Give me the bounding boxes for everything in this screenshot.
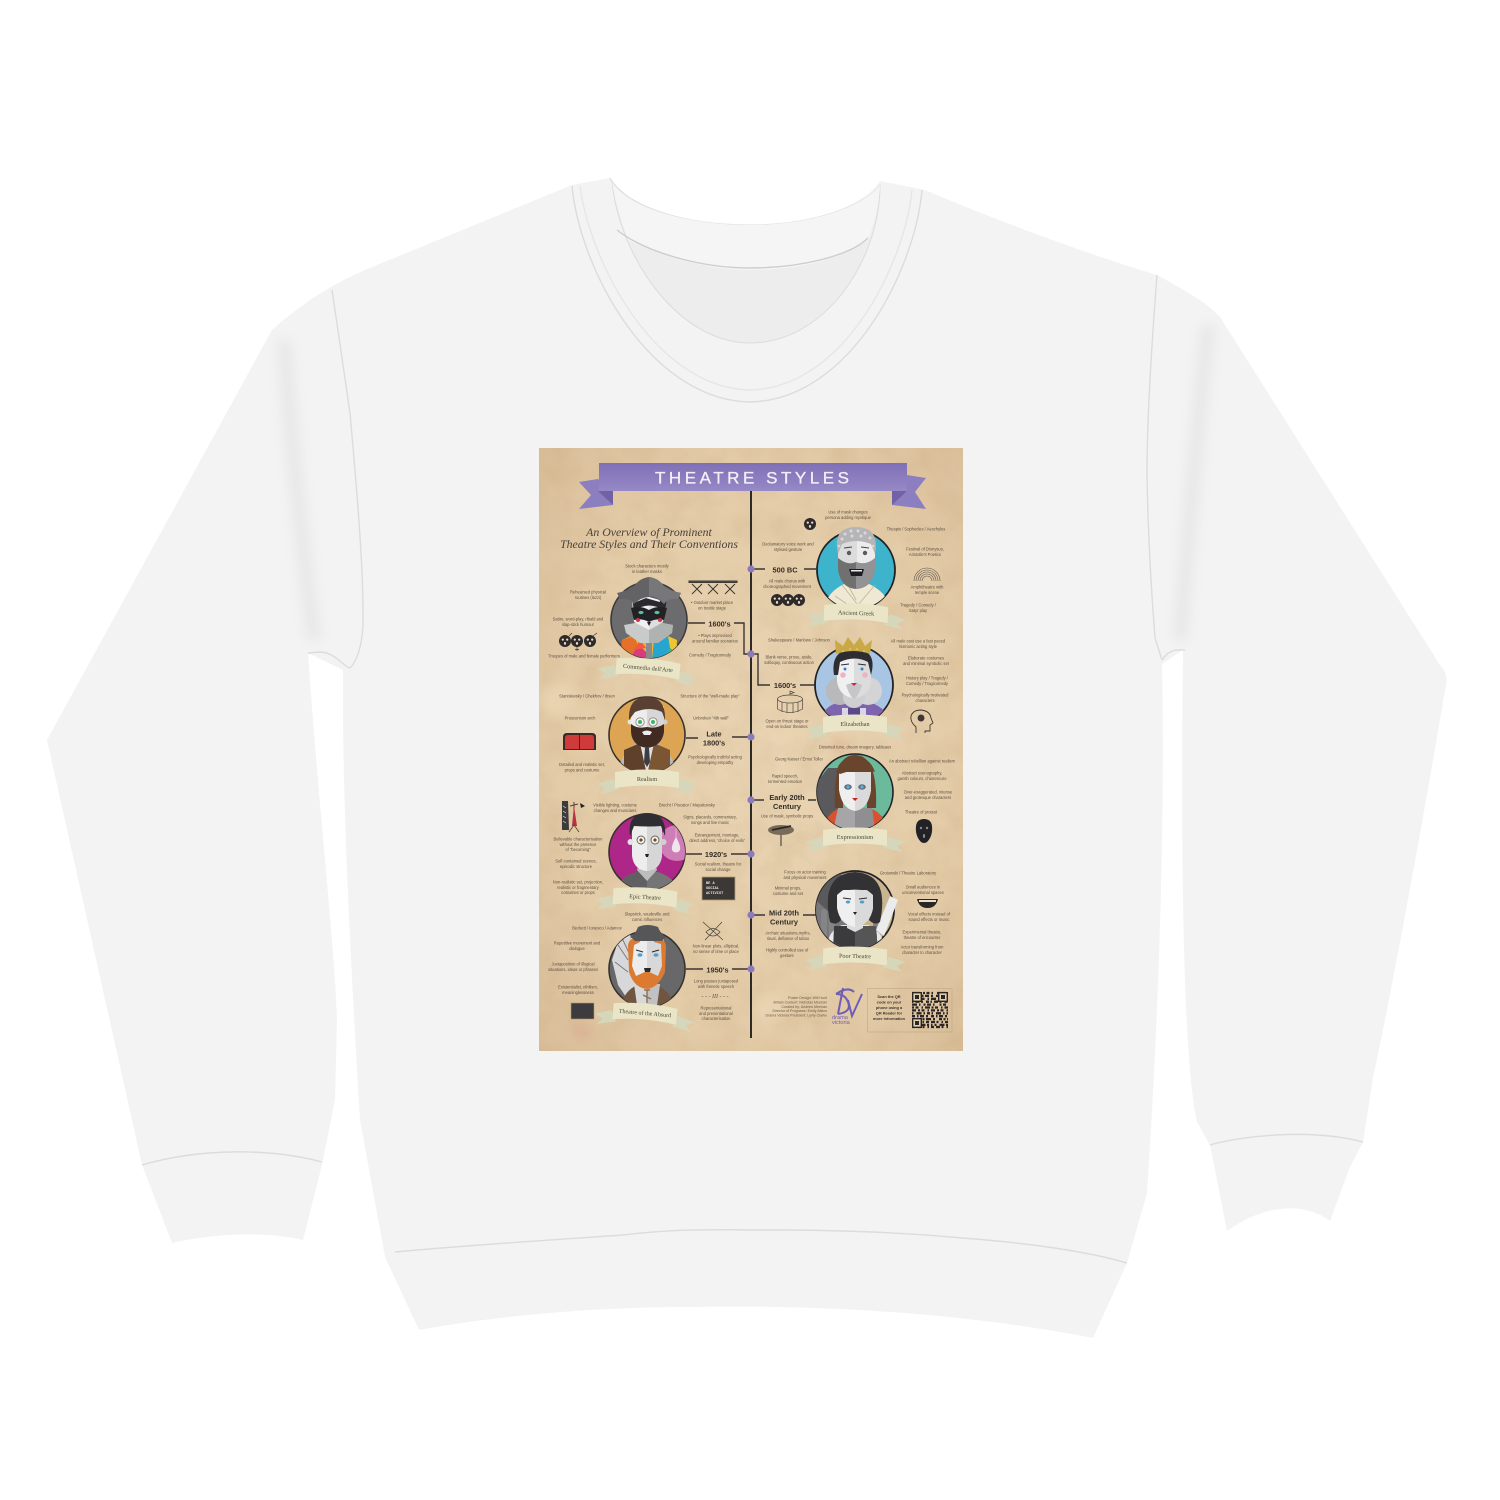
notes: Commedia: Satire, word-play, ribald and bbox=[553, 616, 603, 622]
notes: Absurd: Juxtaposition of illogical bbox=[551, 962, 595, 966]
notes: Ancient Greek: Tragedy / Comedy / bbox=[900, 602, 936, 608]
notes: Epic Theatre: changes and musicians bbox=[594, 808, 636, 813]
notes: Commedia bbox=[548, 564, 738, 658]
notes: Absurd bbox=[548, 912, 740, 1021]
icon: black mask bbox=[916, 819, 932, 843]
QR code bbox=[912, 993, 948, 1027]
notes: Elizabethan: History play / Tragedy / bbox=[906, 676, 948, 680]
QR instruction: more information bbox=[873, 1016, 906, 1021]
notes: Expressionism: Use of mask, symbolic props bbox=[761, 814, 813, 818]
icon: symbolic prop bbox=[768, 825, 794, 846]
notes: Ancient Greek: Thespis / Sophocles / Aeschylus bbox=[887, 526, 945, 532]
notes: Ancient Greek: persona adding mystique bbox=[825, 515, 872, 520]
notes: Ancient Greek: All male chorus with bbox=[769, 578, 805, 584]
notes: Epic Theatre: Brecht / Piscator / Mayakovsky bbox=[659, 802, 716, 808]
connectors bbox=[686, 569, 816, 969]
paper stains bbox=[542, 682, 848, 1042]
icon: chalkboard bbox=[702, 877, 735, 900]
icon: proscenium curtain bbox=[563, 733, 596, 750]
notes: Elizabethan: and minimal symbolic set bbox=[903, 661, 950, 666]
notes: Epic Theatre: without the pretence bbox=[560, 842, 597, 847]
notes: Elizabethan: Psychologically motivated bbox=[902, 692, 948, 698]
icon: mask bbox=[804, 518, 816, 530]
notes: Elizabethan: soliloquy, continuous action bbox=[764, 660, 815, 665]
notes: Elizabethan: Open on thrust stage or bbox=[765, 718, 809, 724]
portrait: Absurd bbox=[609, 925, 685, 1012]
subtitle: Theatre Styles and Their Conventions bbox=[560, 537, 738, 551]
notes: Ancient Greek: Aristotle's Poetics bbox=[909, 552, 941, 557]
notes: Expressionism: An abstract rebellion against realism bbox=[889, 758, 956, 764]
notes: Expressionism: garish colours, chiaroscuro bbox=[898, 776, 947, 781]
raised arm bbox=[876, 896, 898, 936]
notes: Poor Theatre bbox=[765, 870, 951, 958]
logo: drama victoria: victoria bbox=[832, 1020, 851, 1026]
back collar band bbox=[612, 182, 880, 270]
icon: dark panel bbox=[571, 1003, 594, 1019]
logo: drama victoria bbox=[832, 988, 862, 1026]
date: 1600's: 1600's bbox=[774, 681, 796, 690]
notes: Commedia: in leather masks bbox=[632, 569, 662, 574]
notes: Absurd: Slapstick, vaudeville and bbox=[625, 912, 669, 916]
poster bbox=[539, 448, 963, 1051]
notes: Epic Theatre: Estrangement, montage, bbox=[695, 832, 739, 838]
notes: Elizabethan: end-on indoor theatres bbox=[766, 724, 808, 729]
notes: Ancient Greek bbox=[762, 510, 945, 613]
notes: Realism bbox=[559, 694, 743, 772]
notes: Realism: Proscenium arch bbox=[565, 716, 596, 720]
notes: Realism: Stanislavsky / Chekhov / Ibsen bbox=[559, 694, 616, 698]
notes: Epic Theatre: Social realism, theatre for bbox=[695, 862, 741, 866]
notes: Absurd: Existentialist, nihilism, bbox=[558, 984, 598, 990]
icon: chalkboard: BE A bbox=[706, 882, 715, 886]
notes: Epic Theatre: episodic structure bbox=[560, 864, 593, 869]
notes: Ancient Greek: Satyr play bbox=[909, 608, 928, 613]
notes: Poor Theatre: theatre of encounter bbox=[904, 935, 941, 940]
timeline nodes bbox=[747, 565, 755, 973]
sleeve fold shading bbox=[284, 325, 1208, 640]
notes: Ancient Greek: Festival of Dionysus, bbox=[906, 546, 944, 552]
notes: Epic Theatre: Visible lighting, costume bbox=[593, 802, 637, 808]
notes: Commedia: Rehearsed physical bbox=[570, 590, 606, 594]
notes: Absurd: characterisation bbox=[702, 1016, 731, 1021]
notes: Epic Theatre: of "becoming" bbox=[565, 847, 591, 852]
portrait: Commedia bbox=[611, 577, 687, 662]
paper mottling bbox=[539, 448, 963, 1051]
date: Mid 20th Century: Century bbox=[770, 918, 799, 926]
banner: Epic Theatre: Epic Theatre bbox=[629, 893, 661, 902]
notes: Ancient Greek: stylised gesture bbox=[774, 547, 803, 552]
credits: Poster Design: Will Hunt bbox=[788, 996, 827, 1000]
icon: trestle stage bbox=[689, 581, 737, 594]
notes: Epic Theatre: direct address, 'choice of evils' bbox=[689, 838, 745, 843]
panel: Expressionism bbox=[761, 744, 956, 852]
garment seams bbox=[142, 186, 1363, 1263]
notes: Poor Theatre: unconventional spaces bbox=[902, 890, 944, 895]
notes: Commedia: • Outdoor market place bbox=[691, 600, 733, 605]
notes: Expressionism: Distorted tone, dream imagery, tableaux bbox=[819, 744, 891, 750]
notes: Absurd: Non-linear plots, elliptical, bbox=[693, 944, 739, 948]
notes: Commedia: slap-stick humour bbox=[562, 622, 595, 627]
banner: Ancient Greek bbox=[806, 602, 906, 630]
banner: Absurd: Theatre of the Absurd bbox=[619, 1008, 671, 1019]
credits: Drama Victoria President: Lynly Clarke bbox=[765, 1014, 827, 1018]
title ribbon bbox=[579, 463, 926, 509]
icon: open mouth bbox=[917, 899, 938, 908]
icon: chalkboard: SOCIAL bbox=[706, 887, 719, 891]
subtitle: An Overview of Prominent bbox=[586, 525, 712, 539]
notes: Absurd: situations, ideas or phrases bbox=[548, 967, 598, 972]
icon: chalkboard: ACTIVIST bbox=[706, 892, 724, 896]
notes: Commedia: on trestle stage bbox=[698, 605, 727, 610]
icon: amphitheatre bbox=[914, 568, 940, 581]
notes: Epic Theatre: Signs, placards, commentary, bbox=[683, 814, 737, 820]
icon: head with cog bbox=[911, 710, 933, 733]
panel: Elizabethan bbox=[764, 637, 950, 739]
sweatshirt bbox=[47, 178, 1447, 1338]
notes: Expressionism bbox=[761, 744, 956, 818]
icon: three masks bbox=[559, 633, 597, 651]
banner: Ancient Greek: Ancient Greek bbox=[838, 609, 875, 618]
portrait: Poor Theatre bbox=[816, 871, 898, 952]
notes: Poor Theatre: Vocal effects instead of bbox=[908, 912, 950, 916]
notes: Commedia: Stock characters mostly bbox=[625, 564, 669, 568]
notes: Elizabethan: Shakespeare / Marlowe / Johnson bbox=[768, 638, 831, 642]
notes: Expressionism: Rapid speech, bbox=[772, 774, 798, 778]
notes: Ancient Greek: Use of mask changes bbox=[828, 510, 868, 514]
icon: Globe theatre bbox=[778, 691, 802, 713]
crown bbox=[835, 637, 872, 654]
logo: drama victoria: drama bbox=[832, 1015, 848, 1021]
banner: Expressionism: Expressionism bbox=[837, 834, 873, 841]
jester hat bbox=[617, 577, 681, 604]
banner: Poor Theatre bbox=[805, 946, 905, 972]
notes: Poor Theatre: gesture bbox=[780, 953, 795, 958]
date: 1950's: 1950's bbox=[706, 966, 729, 974]
notes: Elizabethan: Elaborate costumes bbox=[908, 656, 944, 660]
notes: Commedia: • Plays improvised bbox=[698, 633, 732, 638]
banner: Commedia bbox=[597, 654, 699, 687]
banner: Elizabethan: Elizabethan bbox=[840, 721, 870, 728]
notes: Ancient Greek: choreographed movement bbox=[763, 584, 812, 589]
notes: Commedia: routines (lazzi) bbox=[575, 595, 602, 600]
icon: chorus masks bbox=[771, 594, 805, 606]
icon: lighting rig bbox=[562, 801, 585, 832]
notes: Poor Theatre: Focus on actor training bbox=[784, 870, 826, 874]
notes: Elizabethan: Comedy / Tragicomedy bbox=[906, 681, 949, 686]
notes: Poor Theatre: Archaic situations,myths, bbox=[765, 930, 811, 936]
banner: Elizabethan bbox=[805, 714, 905, 739]
portrait: Elizabethan bbox=[815, 637, 893, 725]
notes: Epic Theatre: songs and live music bbox=[691, 820, 729, 825]
portrait: Ancient Greek bbox=[817, 527, 895, 612]
notes: Realism: developing empathy bbox=[697, 760, 734, 765]
banner: Commedia: Commedia dell'Arte bbox=[623, 663, 673, 674]
panel: Realism bbox=[559, 694, 743, 794]
credits: Director of Programs: Emily Atkins bbox=[772, 1009, 827, 1013]
notes: Poor Theatre: Experimental theatre, bbox=[903, 930, 941, 934]
banner: Realism: Realism bbox=[637, 776, 657, 783]
banner: Expressionism bbox=[805, 828, 905, 852]
portrait: Expressionism bbox=[817, 754, 893, 832]
banner: Absurd bbox=[594, 999, 696, 1032]
notes: Expressionism: tormented emotion bbox=[768, 779, 803, 784]
notes: Realism: Structure of the "well-made play" bbox=[680, 694, 740, 698]
notes: Absurd: meaninglessness bbox=[562, 990, 594, 995]
notes: Expressionism: Georg Kaiser / Ernst Toller bbox=[775, 756, 824, 762]
notes: Realism: props and costume bbox=[565, 767, 600, 772]
notes: Absurd: with frenetic speech bbox=[698, 984, 735, 989]
QR instruction: Scan the QR bbox=[877, 994, 901, 999]
panel: Ancient Greek bbox=[762, 510, 945, 630]
notes: Elizabethan: Blank verse, prose, aside, bbox=[765, 654, 813, 660]
QR instruction: QR Reader for bbox=[876, 1010, 903, 1016]
panel: Epic Theatre bbox=[553, 801, 745, 915]
banner: Poor Theatre: Poor Theatre bbox=[839, 953, 871, 960]
notes: Poor Theatre: Small audiences in bbox=[906, 884, 940, 890]
notes: Epic Theatre: social change bbox=[705, 867, 731, 872]
notes: Elizabethan: All male cast use a fast paced bbox=[891, 638, 945, 644]
notes: Poor Theatre: Grotowski / Theatre Laboratory bbox=[880, 870, 937, 876]
notes: Elizabethan: characters bbox=[915, 698, 935, 703]
QR panel bbox=[868, 988, 952, 1032]
notes: Absurd: comic influences bbox=[632, 917, 662, 922]
date: Late 1800's: Late bbox=[706, 730, 722, 738]
banner: Realism bbox=[597, 770, 697, 794]
title: THEATRE STYLES bbox=[655, 468, 849, 488]
notes: Absurd: no sense of time or place bbox=[693, 949, 740, 954]
notes: Epic Theatre: Believable characterisation bbox=[554, 836, 602, 842]
notes: Poor Theatre: Actor transforming from bbox=[901, 944, 943, 950]
notes: Absurd: - - - III - - - bbox=[702, 994, 728, 1000]
notes: Epic Theatre: costumes or props bbox=[561, 890, 595, 895]
notes: Poor Theatre: and physical movement bbox=[783, 875, 827, 880]
credits: Curated by: Andrew Meehan bbox=[781, 1005, 827, 1009]
panel: Poor Theatre bbox=[765, 870, 951, 972]
notes: Epic Theatre: realistic or fragmentary bbox=[557, 885, 600, 890]
notes: Epic Theatre: Self-contained scenes, bbox=[555, 858, 597, 864]
notes: Poor Theatre: ritual, defiance of taboo bbox=[767, 936, 810, 941]
notes: Ancient Greek: temple scene bbox=[915, 590, 940, 595]
date: Early 20th Century: Early 20th bbox=[769, 793, 805, 802]
notes: Elizabethan: histrionic acting style bbox=[899, 644, 938, 649]
notes: Commedia: around familiar scenarios bbox=[692, 638, 738, 643]
portrait: Realism bbox=[609, 697, 685, 775]
portrait: Epic Theatre bbox=[608, 813, 686, 889]
notes: Expressionism: Theatre of protest bbox=[905, 810, 938, 814]
banner: Epic Theatre bbox=[594, 885, 695, 915]
notes: Poor Theatre: character to character bbox=[902, 950, 943, 955]
panel: Commedia dell'Arte bbox=[548, 564, 738, 687]
timeline bbox=[686, 491, 816, 1038]
date: Early 20th Century: Century bbox=[773, 802, 802, 811]
notes: Poor Theatre: Highly controlled use of bbox=[766, 948, 808, 952]
notes: Expressionism: Over-exaggerated, intense bbox=[904, 790, 952, 794]
date: 1600's: 1600's bbox=[708, 620, 731, 628]
notes: Ancient Greek: Declamatory voice work and bbox=[762, 542, 814, 546]
notes: Realism: Detailed and realistic set, bbox=[559, 762, 605, 767]
date: 1920's: 1920's bbox=[705, 850, 727, 859]
notes: Elizabethan bbox=[764, 638, 950, 729]
notes: Absurd: and presentational bbox=[699, 1011, 733, 1016]
panel: Theatre of the Absurd bbox=[548, 912, 740, 1032]
notes: Absurd: Long pauses juxtaposed bbox=[694, 978, 738, 984]
notes: Ancient Greek: Amphitheatre with bbox=[911, 584, 943, 590]
date: 500 BC: 500 BC bbox=[772, 566, 798, 574]
notes: Epic Theatre: Non-realistic set, projection, bbox=[553, 880, 603, 884]
QR instruction: code on your bbox=[877, 1000, 902, 1004]
notes: Poor Theatre: sound effects or music bbox=[909, 917, 949, 922]
notes: Commedia: Comedy / Tragicomedy bbox=[689, 652, 732, 658]
notes: Realism: Psychologically truthful acting bbox=[688, 754, 742, 760]
notes: Absurd: dialogue bbox=[569, 946, 585, 951]
date: Mid 20th Century: Mid 20th bbox=[769, 908, 799, 918]
date: Late 1800's: 1800's bbox=[703, 739, 725, 748]
QR instruction: phone using a bbox=[876, 1005, 903, 1010]
notes: Poor Theatre: costume and set bbox=[773, 891, 804, 896]
icon: crossed stage bbox=[703, 922, 723, 940]
neck interior bbox=[610, 178, 880, 343]
notes: Realism: Unbroken "4th wall" bbox=[693, 716, 729, 720]
credits: Britain Content: Nicholas Meehan bbox=[773, 1000, 827, 1004]
notes: Poor Theatre: Minimal props, bbox=[775, 886, 801, 890]
notes: Absurd: Representational bbox=[701, 1006, 731, 1010]
notes: Absurd: Repetitive movement and bbox=[554, 940, 600, 946]
notes: Epic Theatre bbox=[553, 802, 745, 895]
notes: Absurd: Beckett / Ionesco / Adamov bbox=[572, 926, 623, 930]
notes: Expressionism: and grotesque characters bbox=[905, 795, 951, 800]
bowler hat bbox=[631, 925, 666, 941]
notes: Commedia: Troupes of male and female performers bbox=[548, 654, 620, 658]
notes: Expressionism: Abstract scenography, bbox=[902, 770, 942, 776]
